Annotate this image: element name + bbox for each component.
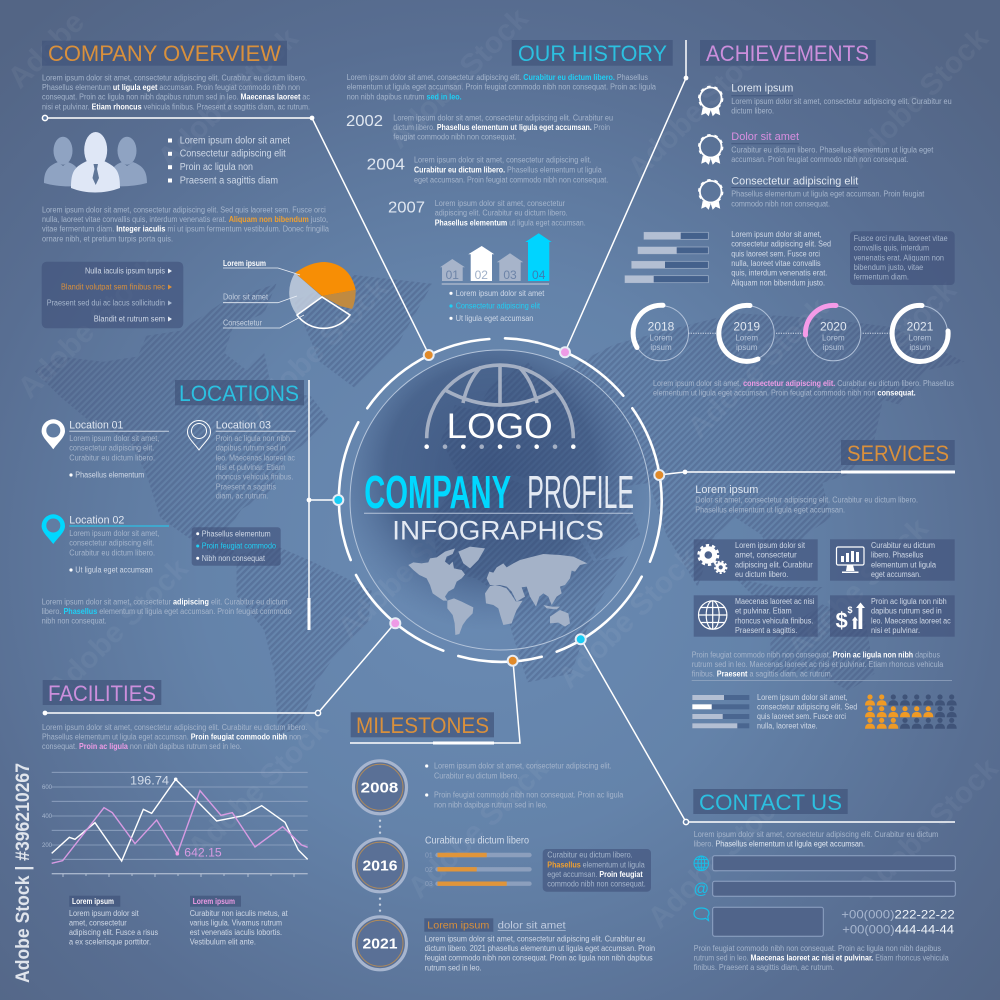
location 03: Location 03 xyxy=(216,420,271,432)
timeline entry 2002: 2002 xyxy=(346,113,383,130)
locations paragraph: libero. Phasellus elementum ut ligula eget accumsan. Proin feugiat commodo xyxy=(42,607,292,616)
service card: gears: eu dictum libero. xyxy=(735,570,788,579)
bars text xyxy=(731,230,831,287)
callout box: convallis quis, interdum xyxy=(854,244,929,253)
location 03: Proin ac ligula non nibh xyxy=(216,434,290,443)
services bars text: Lorem ipsum dolor sit amet, xyxy=(757,693,848,702)
menu box: Nulla iaculis ipsum turpis xyxy=(85,267,165,276)
progress ring 2019 xyxy=(719,305,774,361)
pie chart: Consectetur xyxy=(223,318,262,328)
service card: monitor chart xyxy=(830,539,955,581)
services bars xyxy=(692,695,749,728)
timeline entry 2004: Curabitur eu dictum libero. Phasellus elementum ut ligula xyxy=(414,166,602,175)
services intro: Phasellus elementum ut ligula eget accumsan. xyxy=(695,506,845,515)
timeline entry 2002: feugiat commodo nibh non consequat. xyxy=(393,133,517,142)
achievement 2: accumsan. Proin feugiat commodo nibh non consequat. xyxy=(731,155,908,164)
stock watermarks: Adobe Stock xyxy=(242,272,395,425)
rings caption: Lorem ipsum dolor sit amet, consectetur adipiscing elit. Curabitur eu dictum libero. Phasellus xyxy=(653,379,954,388)
service card: globe: Praesent a sagittis. xyxy=(735,626,797,635)
intro text: nisi et pulvinar. Etiam rhoncus vehicula finibus. Praesent a sagittis diam, ac rutrum. xyxy=(42,102,310,111)
callout box: fermentum diam. xyxy=(854,273,909,282)
location 03: dapibus rutrum sed in xyxy=(216,444,286,453)
chart note 1: Lorem ipsum dolor sit xyxy=(69,909,139,918)
milestone progress bars: Curabitur eu dictum libero xyxy=(425,836,529,846)
menu box: Blandit et rutrum sem xyxy=(94,315,165,324)
progress ring 2018: Lorem xyxy=(650,334,673,342)
location 02 xyxy=(42,514,169,575)
services bars text: quis laoreet sem. Fusce orci xyxy=(757,712,846,721)
heading: CONTACT US xyxy=(699,790,842,815)
achievement 1: dictum libero. xyxy=(731,107,774,116)
milestone bullets: Curabitur eu dictum libero. xyxy=(434,771,519,780)
bars text: consectetur adipiscing elit. Sed xyxy=(731,240,831,249)
locations list box: Phasellus elementum xyxy=(202,529,271,538)
progress ring 2021: Lorem xyxy=(909,334,932,342)
stock watermarks: Adobe Stock xyxy=(842,22,995,175)
icon: monitor chart xyxy=(836,547,864,573)
connector lines xyxy=(42,40,955,825)
location 02: consectetur adipiscing elit. xyxy=(69,539,154,548)
services intro: Lorem ipsum xyxy=(695,484,758,496)
location 02: Lorem ipsum dolor sit amet, xyxy=(69,529,159,538)
panel: milestones xyxy=(351,712,655,972)
contact footer text: Proin feugiat commodo nibh non consequat. Proin ac ligula non nibh dapibus xyxy=(694,944,941,953)
stock watermarks: Adobe Stock xyxy=(402,752,555,905)
horizontal bars xyxy=(625,232,708,283)
line chart: 200 xyxy=(42,843,53,849)
chart note 2: varius ligula. Vivamus rutrum xyxy=(190,918,282,927)
progress ring 2018: 2018 xyxy=(648,320,675,334)
facilities paragraph: Lorem ipsum dolor sit amet, consectetur adipiscing elit. Curabitur eu dictum libero. xyxy=(42,723,307,732)
icon: globe xyxy=(698,601,727,629)
bars text: nulla, laoreet vitae convallis xyxy=(731,259,821,268)
intro text xyxy=(347,73,657,101)
logo globe dome xyxy=(427,365,573,438)
stock watermarks: Adobe Stock xyxy=(42,552,195,705)
location 02: Ut ligula eget accumsan xyxy=(75,566,153,575)
intro text: Lorem ipsum dolor sit amet, consectetur adipiscing elit. Curabitur eu dictum libero. xyxy=(42,73,307,82)
small world map xyxy=(408,547,587,635)
timeline entry 2004: 2004 xyxy=(367,156,405,174)
location 03: rhoncus vehicula finibus. xyxy=(216,473,293,482)
title: profile: PROFILE xyxy=(527,466,634,518)
bullet list: Praesent a sagittis diam xyxy=(180,175,278,186)
timeline entry 2002: dictum libero. Phasellus elementum ut ligula eget accumsan. Proin xyxy=(393,123,610,132)
progress ring 2021: 2021 xyxy=(907,320,934,334)
panel: facilities xyxy=(42,680,308,947)
intro text: Phasellus elementum ut ligula eget accumsan. Proin feugiat commodo nibh non xyxy=(42,83,300,92)
ring nodes xyxy=(333,347,664,666)
service card: gears xyxy=(694,539,818,581)
line chart: 600 xyxy=(42,785,53,791)
chart note 1: a ex scelerisque porttitor. xyxy=(69,938,151,947)
location 03: Praesent a sagittis xyxy=(216,482,276,491)
heading: COMPANY OVERVIEW xyxy=(48,41,281,66)
paragraph: Lorem ipsum dolor sit amet, consectetur adipiscing elit. Sed quis laoreet sem. Fusce orci xyxy=(42,206,326,215)
arrow chart: 01 xyxy=(446,268,459,282)
timeline entry 2007 xyxy=(388,199,586,227)
stock watermarks: Adobe Stock xyxy=(12,252,165,405)
panel: locations xyxy=(42,380,304,626)
location 01: Phasellus elementum xyxy=(75,471,145,480)
location 03: leo. Maecenas laoreet ac xyxy=(216,453,295,462)
contact intro: Lorem ipsum dolor sit amet, consectetur adipiscing elit. Curabitur eu dictum xyxy=(694,830,939,839)
achievement 2: Dolor sit amet xyxy=(731,131,799,143)
phone numbers: +00(000) 444-44-44 xyxy=(842,922,954,936)
timeline entry 2002 xyxy=(346,113,613,142)
stock watermarks: Stock xyxy=(882,274,963,355)
achievement 2 xyxy=(699,131,934,165)
chart note 1: adipiscing elit. Fusce a risus xyxy=(69,928,158,937)
form fields xyxy=(713,856,955,936)
chart note 2 xyxy=(190,896,288,947)
outer segmented ring xyxy=(339,338,662,662)
progress ring 2018 xyxy=(633,305,688,361)
service card: finance: nisi et pulvinar. xyxy=(871,626,920,635)
milestone bullets: Proin feugiat commodo nibh non consequat. Proin ac ligula xyxy=(434,791,624,800)
service card: monitor chart: eget accumsan. xyxy=(871,570,921,579)
bullet list: Lorem ipsum dolor sit amet xyxy=(180,135,290,146)
intro text: Lorem ipsum dolor sit amet, consectetur adipiscing elit. Curabitur eu dictum libero. Phasellus xyxy=(347,73,648,82)
milestone paragraph: feugiat commodo nibh non consequat. Proin ac ligula non nibh dapibus xyxy=(425,954,653,963)
panel: contact us xyxy=(693,789,955,972)
bars text: quis laoreet sem. Fusce orci xyxy=(731,249,820,258)
timeline entry 2007: 2007 xyxy=(388,200,425,216)
milestone paragraph xyxy=(425,935,655,972)
arrow chart: 02 xyxy=(475,268,488,282)
progress ring 2020: Lorem xyxy=(822,334,845,342)
heading: OUR HISTORY xyxy=(518,41,667,66)
pie chart: Lorem ipsum xyxy=(223,259,266,268)
chart note 1: amet, consectetur xyxy=(69,918,127,927)
stock watermarks: Adobe Stock xyxy=(782,512,935,665)
achievement 2: Curabitur eu dictum libero. Phasellus elementum ut ligula eget xyxy=(731,146,934,155)
milestone badge 2008: 2008 xyxy=(361,780,398,796)
timeline entry 2004: eget accumsan. Proin feugiat commodo nibh non consequat. xyxy=(414,176,608,185)
service card: finance xyxy=(830,595,955,637)
icon: web xyxy=(694,856,709,871)
bullet list xyxy=(168,135,290,186)
contact intro xyxy=(694,830,939,849)
milestone badge 2021: 2021 xyxy=(362,936,398,952)
chart note 2: Lorem ipsum xyxy=(193,897,235,906)
achievement 3: commodo nibh non consequat. xyxy=(731,199,830,208)
heading: ACHIEVEMENTS xyxy=(706,41,869,66)
paragraph xyxy=(42,206,329,243)
phone numbers xyxy=(841,908,955,936)
callout box xyxy=(850,231,955,285)
callout box: venenatis erat. Aliquam non xyxy=(854,253,944,262)
location 01: consectetur adipiscing elit. xyxy=(69,444,154,453)
milestone subheading: Lorem ipsum xyxy=(427,920,489,932)
panel: company overview xyxy=(42,41,356,328)
service card: globe: et pulvinar. Etiam xyxy=(735,607,792,616)
stock watermarks: Adobe Stock xyxy=(682,292,835,445)
icon: dollar arrows xyxy=(836,602,865,633)
service card: globe: rhoncus vehicula finibus. xyxy=(735,616,813,625)
line chart xyxy=(42,772,308,877)
milestone badge 2008 xyxy=(354,761,406,814)
arrow chart: 04 xyxy=(532,268,546,282)
achievement 3: Consectetur adipiscing elit xyxy=(731,176,858,188)
paragraph: nulla, laoreet vitae convallis quis, interdum venenatis erat. Aliquam non bibendum justo, xyxy=(42,215,328,224)
milestone progress bars: 02 xyxy=(425,867,433,874)
location 03: nisi et pulvinar. Etiam xyxy=(216,463,285,472)
timeline entry 2004 xyxy=(367,156,608,185)
line chart: 196.74 xyxy=(130,774,169,788)
stock watermarks: Adobe Stock xyxy=(332,492,485,645)
contact footer text: rutrum sed in leo. Maecenas laoreet ac nisi et pulvinar. Etiam rhoncus vehicula xyxy=(694,954,949,963)
intro text: consequat. Proin ac ligula non nibh dapibus rutrum sed in leo. Maecenas laoreet ac xyxy=(42,93,310,102)
locations paragraph: nibh non consequat. xyxy=(42,617,107,626)
icon: dollar arrows: $ xyxy=(836,608,848,633)
icon: dollar arrows: $ xyxy=(848,605,853,615)
paragraph: vitae fermentum diam. Integer iaculis mi ut ipsum fermentum vestibulum. Donec fringilla xyxy=(42,225,329,234)
subtitle: infographics: INFOGRAPHICS xyxy=(392,515,604,545)
contact footer text: finibus. Praesent a sagittis diam, ac rutrum. xyxy=(694,963,834,972)
service card: finance: Proin ac ligula non nibh xyxy=(871,597,947,606)
facilities paragraph: Phasellus elementum ut ligula eget accumsan. Proin feugiat commodo nibh non xyxy=(42,732,301,741)
milestone progress bars xyxy=(425,836,530,888)
line chart: 642.15 xyxy=(184,846,222,860)
contact intro: libero. Phasellus elementum ut ligula eget accumsan. xyxy=(694,840,865,849)
stock watermarks: Adobe Stock xyxy=(152,22,305,175)
heading: FACILITIES xyxy=(48,681,156,706)
heading: SERVICES xyxy=(847,441,949,466)
intro text: non nibh dapibus rutrum sed in leo. xyxy=(347,92,462,101)
arrow chart xyxy=(440,233,552,284)
facilities paragraph xyxy=(42,723,307,751)
service card: gears: adipiscing elit. Curabitur xyxy=(735,560,813,569)
rings caption: elementum ut ligula eget accumsan. Proin feugiat commodo nibh non consequat. xyxy=(653,389,916,398)
location 01: Location 01 xyxy=(69,420,123,432)
progress ring 2019: ipsum xyxy=(736,343,758,352)
timeline entry 2007: Lorem ipsum dolor sit amet, consectetur xyxy=(435,199,565,208)
logo text: LOGO xyxy=(447,407,553,446)
intro text xyxy=(42,73,310,111)
service card: monitor chart: elementum ut ligula xyxy=(871,560,937,569)
arrow chart: 03 xyxy=(503,268,517,282)
stock watermarks: Adobe Stock xyxy=(552,542,705,695)
timeline entry 2002: Lorem ipsum dolor sit amet, consectetur adipiscing elit. Curabitur eu xyxy=(393,113,613,122)
milestone badge 2016 xyxy=(354,839,406,892)
services bars text: consectetur adipiscing elit. Sed xyxy=(757,702,857,711)
milestone callout: Curabitur eu dictum libero. xyxy=(547,851,633,860)
rings caption xyxy=(653,379,954,398)
milestone bullets: non nibh dapibus rutrum sed in leo. xyxy=(434,800,548,809)
arrow chart bullets xyxy=(449,288,545,323)
milestone progress bars: 01 xyxy=(425,852,433,860)
arrow chart bullets: Consectetur adipiscing elit xyxy=(456,301,541,311)
chart note 2: est venenatis iaculis lobortis. xyxy=(190,928,282,937)
panel: our history xyxy=(346,40,673,323)
service card: globe xyxy=(694,595,818,637)
chart note 2: Vestibulum elit ante. xyxy=(190,938,256,947)
services paragraph: finibus. Praesent a sagittis diam, ac rutrum. xyxy=(692,670,833,679)
progress ring 2020: 2020 xyxy=(820,320,847,334)
location 02: Location 02 xyxy=(69,514,124,526)
milestone callout: Phasellus elementum ut ligula xyxy=(547,860,645,869)
achievement 1 xyxy=(699,82,952,116)
arrow chart bullets: Lorem ipsum dolor sit amet xyxy=(456,288,545,298)
timeline entry 2004: Lorem ipsum dolor sit amet, consectetur adipiscing elit. xyxy=(414,156,592,165)
services paragraph xyxy=(692,651,944,679)
timeline entry 2007: adipiscing elit. Curabitur eu dictum libero. xyxy=(435,209,568,218)
menu box xyxy=(42,262,183,328)
service card: finance: leo. Maecenas laoreet ac xyxy=(871,616,951,625)
milestone badge 2021 xyxy=(354,917,406,970)
service card: monitor chart: libero. Phasellus xyxy=(871,551,923,560)
milestone progress bars: 03 xyxy=(425,881,433,888)
milestone badge 2016: 2016 xyxy=(362,858,398,874)
location 03: diam, ac rutrum. xyxy=(216,492,268,501)
icon: at sign: @ xyxy=(694,881,709,898)
stock watermarks: Adobe Stock xyxy=(622,32,775,185)
heading: MILESTONES xyxy=(356,713,489,738)
locations list box: Nibh non consequat xyxy=(202,554,266,563)
logo dots xyxy=(424,444,576,449)
milestone paragraph: rutrum sed in leo. xyxy=(425,963,482,972)
locations list box xyxy=(192,527,281,566)
milestone bullets xyxy=(425,762,624,809)
contact footer text xyxy=(694,944,949,972)
milestone callout: eget accumsan. Proin feugiat xyxy=(547,870,643,879)
milestone paragraph: Lorem ipsum dolor sit amet, consectetur adipiscing elit. Curabitur eu xyxy=(425,935,645,944)
achievement 1: Lorem ipsum dolor sit amet, consectetur adipiscing elit. Curabitur eu xyxy=(731,97,952,106)
callout box: bibendum justo, vitae xyxy=(854,263,924,272)
chart note 2: Curabitur non iaculis metus, at xyxy=(190,909,288,918)
panel: services xyxy=(692,440,957,731)
locations paragraph: Lorem ipsum dolor sit amet, consectetur adipiscing elit. Curabitur eu dictum xyxy=(42,597,288,606)
services paragraph: rutrum sed in leo. Maecenas laoreet ac nisi et pulvinar. Etiam rhoncus vehicula xyxy=(692,660,944,669)
people pictogram xyxy=(865,694,957,729)
background striped world map xyxy=(34,275,965,734)
service card: gears: amet, consectetur xyxy=(735,551,797,560)
progress ring 2019: Lorem xyxy=(735,334,758,342)
panel: achievements xyxy=(625,40,955,398)
bullet list: Consectetur adipiscing elit xyxy=(180,149,286,160)
bars text: Lorem ipsum dolor sit amet, xyxy=(731,230,822,239)
paragraph: ornare nibh, et pretium turpis porta quis. xyxy=(42,234,173,243)
heading: LOCATIONS xyxy=(179,381,299,406)
service card: globe: Maecenas laoreet ac nisi xyxy=(735,597,814,606)
stock watermarks: Adobe Stock xyxy=(382,2,535,155)
milestone callout xyxy=(543,849,651,892)
achievement 3 xyxy=(699,176,925,210)
pie chart xyxy=(223,259,356,328)
achievement 1: Lorem ipsum xyxy=(731,82,793,94)
milestone bullets: Lorem ipsum dolor sit amet, consectetur adipiscing elit. xyxy=(434,762,612,771)
icon: gears xyxy=(698,545,726,573)
menu box: Praesent sed dui ac lacus sollicitudin xyxy=(47,299,165,308)
progress ring 2020: ipsum xyxy=(823,343,844,352)
phone numbers: +00(000) 222-22-22 xyxy=(841,908,955,922)
inner disc xyxy=(350,350,650,650)
stock id vertical label: Adobe Stock | #396210267 xyxy=(13,763,34,983)
services paragraph: Proin feugiat commodo nibh non consequat. Proin ac ligula non nibh dapibus xyxy=(692,651,940,660)
location 01: Lorem ipsum dolor sit amet, xyxy=(69,434,159,443)
locations list box: Proin feugiat commodo xyxy=(202,542,276,551)
milestone subheading xyxy=(424,918,566,932)
bullet list: Proin ac ligula non xyxy=(180,162,253,173)
service card: finance: dapibus rutrum sed in xyxy=(871,607,942,616)
timeline entry 2007: Phasellus elementum ut ligula eget accumsan. xyxy=(435,218,586,227)
milestone callout: commodo nibh non consequat. xyxy=(547,880,646,889)
icon: business people xyxy=(44,132,147,192)
menu box: Blandit volutpat sem finibus nec xyxy=(61,283,165,292)
title: company: COMPANY xyxy=(364,466,511,518)
stock watermarks: Adobe Stock xyxy=(642,782,795,935)
stock watermarks: Adobe Stock xyxy=(182,712,335,865)
facilities paragraph: consequat. Proin ac ligula non nibh dapibus rutrum sed in leo. xyxy=(42,742,242,751)
progress ring 2021 xyxy=(892,305,948,361)
milestone paragraph: dictum libero. 2021 phasellus elementum ut ligula eget accumsan. Proin xyxy=(425,944,655,953)
location 02: Curabitur eu dictum libero. xyxy=(69,548,155,557)
progress ring 2018: ipsum xyxy=(650,343,672,352)
progress ring 2019: 2019 xyxy=(733,320,760,334)
locations paragraph xyxy=(42,597,292,626)
services intro: Dolor sit amet, consectetur adipiscing elit. Curabitur eu dictum libero. xyxy=(695,496,918,505)
progress ring 2021: ipsum xyxy=(909,343,931,352)
bars text: quis, interdum venenatis erat. xyxy=(731,269,827,278)
arrow chart bullets: Ut ligula eget accumsan xyxy=(456,313,534,323)
achievement 3: Phasellus elementum ut ligula eget accumsan. Proin feugiat xyxy=(731,190,925,199)
chart note 1: Lorem ipsum xyxy=(72,897,114,906)
progress ring 2020 xyxy=(805,305,861,361)
location 01 xyxy=(42,419,169,480)
services bars text xyxy=(757,693,857,731)
icon: speech bubble xyxy=(694,908,709,920)
services intro xyxy=(695,484,918,515)
chart note 1 xyxy=(69,896,158,947)
service card: gears: Lorem ipsum dolor sit xyxy=(735,541,806,550)
stock watermarks: Adobe xyxy=(2,6,91,95)
line chart: 400 xyxy=(42,814,53,820)
services bars text: nulla, laoreet vitae. xyxy=(757,722,818,731)
service card: monitor chart: Curabitur eu dictum xyxy=(871,541,935,550)
intro text: elementum ut ligula eget accumsan. Proin feugiat commodo nibh non consequat. Proin ac ligula xyxy=(347,83,657,92)
callout box: Fusce orci nulla, laoreet vitae xyxy=(854,234,948,243)
panel: central hub xyxy=(333,338,664,666)
milestone subheading: dolor sit amet xyxy=(498,920,566,932)
location 03 xyxy=(188,420,296,501)
pie chart: Dolor sit amet xyxy=(223,292,269,302)
bars text: Aliquam non bibendum justo. xyxy=(731,278,825,287)
location 01: Curabitur eu dictum libero. xyxy=(69,453,155,462)
